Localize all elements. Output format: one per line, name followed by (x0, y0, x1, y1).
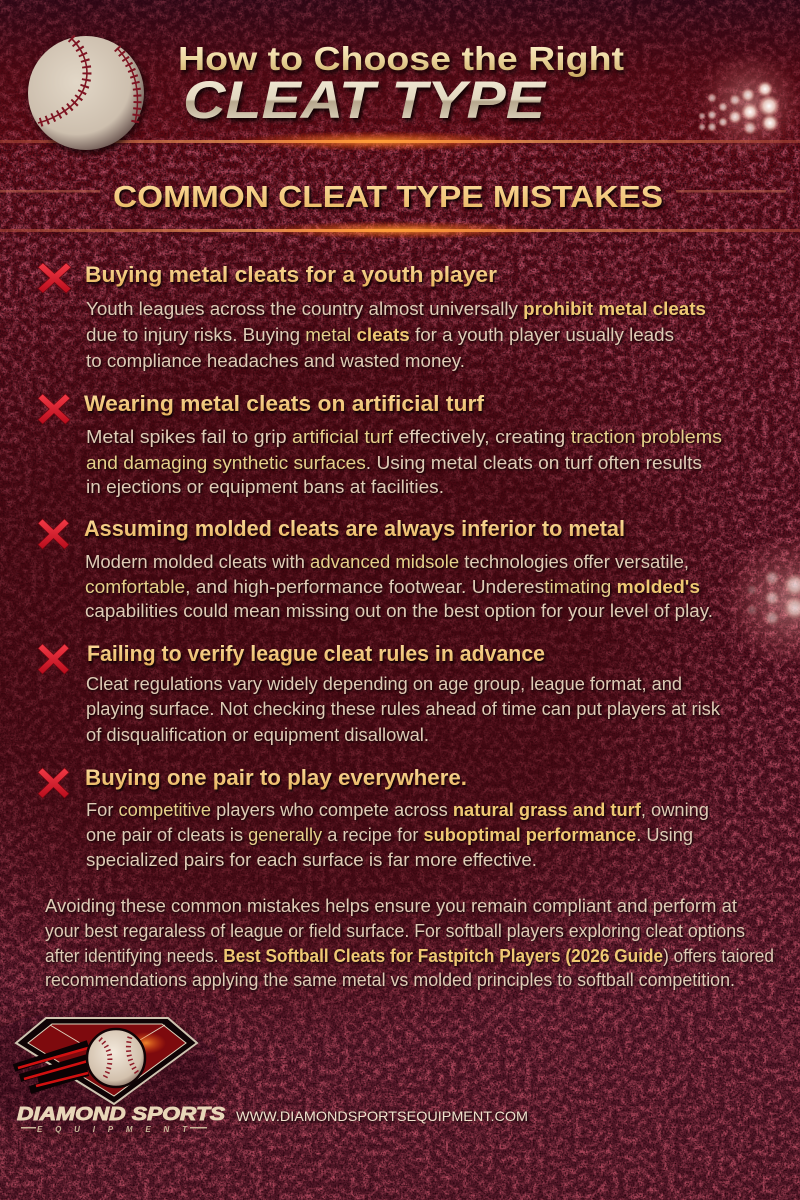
title (178, 40, 624, 130)
mistake 4 body: Cleat regulations vary widely depending on age group, league format, and (86, 674, 682, 694)
stadium lights right middle (722, 532, 800, 668)
diamond emblem (14, 1018, 197, 1104)
mistake 4 body (86, 674, 721, 745)
website url: WWW.DIAMONDSPORTSEQUIPMENT.COM (236, 1108, 528, 1124)
mistake 3 body: capabilities could mean missing out on the best option for your level of play. (85, 601, 713, 621)
title: CLEAT TYPE (183, 71, 547, 130)
mistake 1 body: Youth leagues across the country almost universally prohibit metal cleats (86, 299, 706, 319)
mistake 5 body: specialized pairs for each surface is far more effective. (86, 850, 537, 870)
mistake 4 body: playing surface. Not checking these rules ahead of time can put players at risk (86, 699, 721, 719)
mistake 1 body: due to injury risks. Buying metal cleats for a youth player usually leads (86, 325, 674, 345)
closing paragraph (45, 896, 774, 990)
mistake 2 body: and damaging synthetic surfaces . Using metal cleats on turf often results (86, 453, 702, 473)
mistake 2 heading: Wearing metal cleats on artificial turf (84, 391, 485, 416)
closing paragraph: recommendations applying the same metal vs molded principles to softball competition. (45, 970, 735, 990)
mistake 4 (38, 641, 721, 745)
mistake 5 body: For competitive players who compete across natural grass and turf, owning (86, 800, 709, 820)
icon: red x (38, 768, 69, 798)
section heading: COMMON CLEAT TYPE MISTAKES (113, 179, 663, 214)
mistake 5 body: one pair of cleats is generally a recipe for suboptimal performance. Using (86, 825, 693, 845)
icon: red x (38, 644, 69, 674)
mistake 3 body: comfortable , and high-performance footwear. Underes timating molded's (85, 577, 700, 597)
baseball icon (28, 36, 144, 150)
lower glowing divider (0, 221, 800, 239)
logo: Diamond Sports Equipment (14, 1018, 225, 1134)
mistake 5 body (86, 800, 709, 870)
mistake 3 heading: Assuming molded cleats are always inferior to metal (84, 516, 625, 541)
mistake 5 heading: Buying one pair to play everywhere. (85, 765, 467, 790)
icon: red x (38, 263, 71, 293)
mistake 4 body: of disqualification or equipment disallowal. (86, 725, 429, 745)
mistake 1 body: to compliance headaches and wasted money. (86, 351, 465, 371)
mistake 2 (38, 391, 722, 497)
mistake 5 (38, 765, 709, 870)
mistake 3 body: Modern molded cleats with advanced midsole technologies offer versatile, (85, 552, 689, 572)
mistake 1 body (86, 299, 706, 371)
mistake 1 heading: Buying metal cleats for a youth player (85, 262, 497, 287)
icon: red x (38, 394, 70, 424)
icon: red x (38, 519, 69, 549)
title: How to Choose the Right (178, 40, 624, 77)
closing paragraph: Avoiding these common mistakes helps ensure you remain compliant and perform at (45, 896, 737, 916)
logo subtitle: EQUIPMENT (37, 1125, 188, 1134)
mistake 2 body (86, 427, 722, 497)
mistake 3 body (85, 552, 713, 621)
mistake 1 (38, 262, 706, 371)
mistake 3 (38, 516, 713, 621)
mistake 4 heading: Failing to verify league cleat rules in advance (87, 641, 545, 666)
top glowing divider (0, 131, 800, 151)
mistake 2 body: Metal spikes fail to grip artificial turf effectively, creating traction problems (86, 427, 722, 447)
closing paragraph: after identifying needs. Best Softball Cleats for Fastpitch Players (2026 Guide) offers taiored (45, 946, 774, 966)
mistake 2 body: in ejections or equipment bans at facilities. (86, 477, 444, 497)
closing paragraph: your best regaraless of league or field surface. For softball players exploring cleat options (45, 921, 745, 941)
stadium lights top right (696, 51, 800, 159)
logo wordmark: DIAMOND SPORTS (17, 1104, 225, 1124)
